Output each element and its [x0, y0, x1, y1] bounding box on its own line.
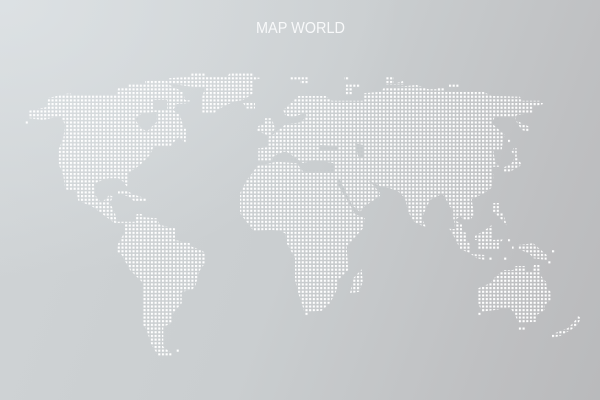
- New Guinea: [518, 243, 555, 264]
- Australia: [478, 265, 551, 330]
- Madagascar: [350, 269, 363, 293]
- Eurasia: [258, 85, 543, 227]
- Britain and Ireland: [257, 118, 275, 137]
- Southeast Asia islands: [449, 203, 515, 260]
- Japan and Sakhalin: [504, 140, 522, 172]
- South America: [110, 214, 205, 356]
- North and Central America: [25, 80, 190, 222]
- title: MAP WORLD: [256, 20, 345, 37]
- world map: [25, 73, 581, 356]
- Arctic islands: [290, 77, 460, 95]
- Africa: [240, 162, 365, 316]
- New Zealand: [551, 316, 581, 338]
- Greenland and Iceland: [168, 73, 261, 113]
